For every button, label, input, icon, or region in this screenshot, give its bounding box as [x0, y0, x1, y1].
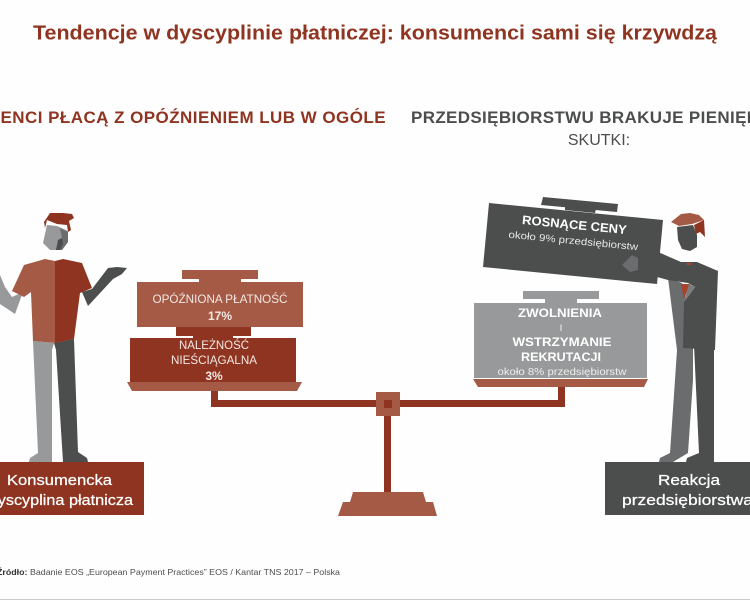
weight: layoffs: REKRUTACJI [521, 352, 601, 364]
weight: layoffs: I [560, 323, 562, 333]
weight: rising prices: ROSNĄCE CENY [521, 213, 628, 237]
icon: hand [622, 255, 638, 272]
title: Tendencje w dyscyplinie płatniczej: konsumenci sami się krzywdzą [33, 22, 718, 44]
right scale pan [473, 379, 648, 387]
figure: consumer [0, 213, 127, 462]
weight: rising prices: około 9% przedsiębiorstw [508, 230, 639, 253]
figure: businessman [657, 213, 718, 462]
label: business reaction [605, 462, 750, 515]
subheading: effects: SKUTKI: [568, 132, 630, 149]
weight: bad debt: 3% [205, 369, 223, 383]
weight: delayed payment: 17% [208, 309, 232, 323]
weight: layoffs [474, 291, 647, 378]
weight: bad debt [130, 327, 296, 383]
left scale pan [127, 382, 302, 391]
weight: layoffs: ZWOLNIENIA [518, 308, 602, 320]
weight: layoffs: około 8% przedsiębiorstw [498, 367, 627, 378]
weight: layoffs: WSTRZYMANIE [512, 337, 612, 349]
label: business reaction: przedsiębiorstwa [622, 492, 750, 509]
label: consumer discipline [0, 462, 144, 515]
weight: bad debt: NIEŚCIĄGALNA [171, 354, 257, 367]
source note: Źródło: Badanie EOS „European Payment Practices” EOS / Kantar TNS 2017 – Polska [0, 567, 340, 577]
weight: delayed payment [137, 270, 303, 327]
scale [211, 387, 565, 516]
weight: rising prices [483, 197, 663, 284]
weight: bad debt: NALEŻNOŚĆ [179, 339, 249, 352]
label: consumer discipline: Konsumencka [7, 472, 113, 489]
label: business reaction: Reakcja [658, 472, 721, 489]
weight: delayed payment: OPÓŹNIONA PŁATNOŚĆ [152, 293, 288, 306]
